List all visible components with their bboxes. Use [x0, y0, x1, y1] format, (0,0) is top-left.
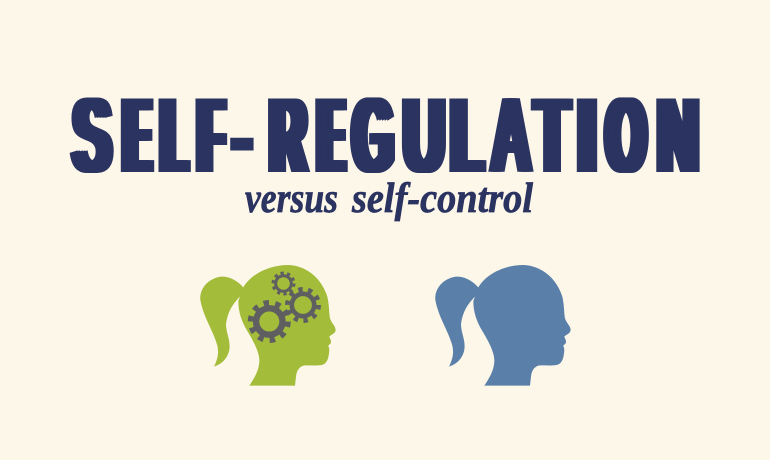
small gear: [273, 273, 294, 294]
medium gear: [288, 290, 318, 320]
title: L: [452, 75, 482, 195]
title: I: [572, 75, 602, 195]
title: E: [124, 75, 149, 195]
icon: blue head: [435, 265, 571, 386]
title: O: [607, 75, 645, 195]
icon: green head with gears: [200, 265, 336, 386]
large gear: [251, 303, 288, 340]
green head silhouette: [200, 265, 336, 386]
subtitle: self-control: [351, 176, 533, 222]
title: E: [320, 75, 342, 195]
title: [70, 75, 700, 195]
title: T: [535, 75, 569, 195]
subtitle: versus: [245, 176, 338, 222]
title: F: [199, 75, 223, 195]
title: R: [270, 75, 306, 195]
title: G: [353, 75, 393, 195]
title: L: [162, 75, 186, 195]
title: A: [491, 75, 531, 195]
title: -: [227, 75, 257, 195]
title: N: [657, 75, 698, 195]
title: U: [403, 75, 444, 195]
title: S: [73, 75, 110, 195]
